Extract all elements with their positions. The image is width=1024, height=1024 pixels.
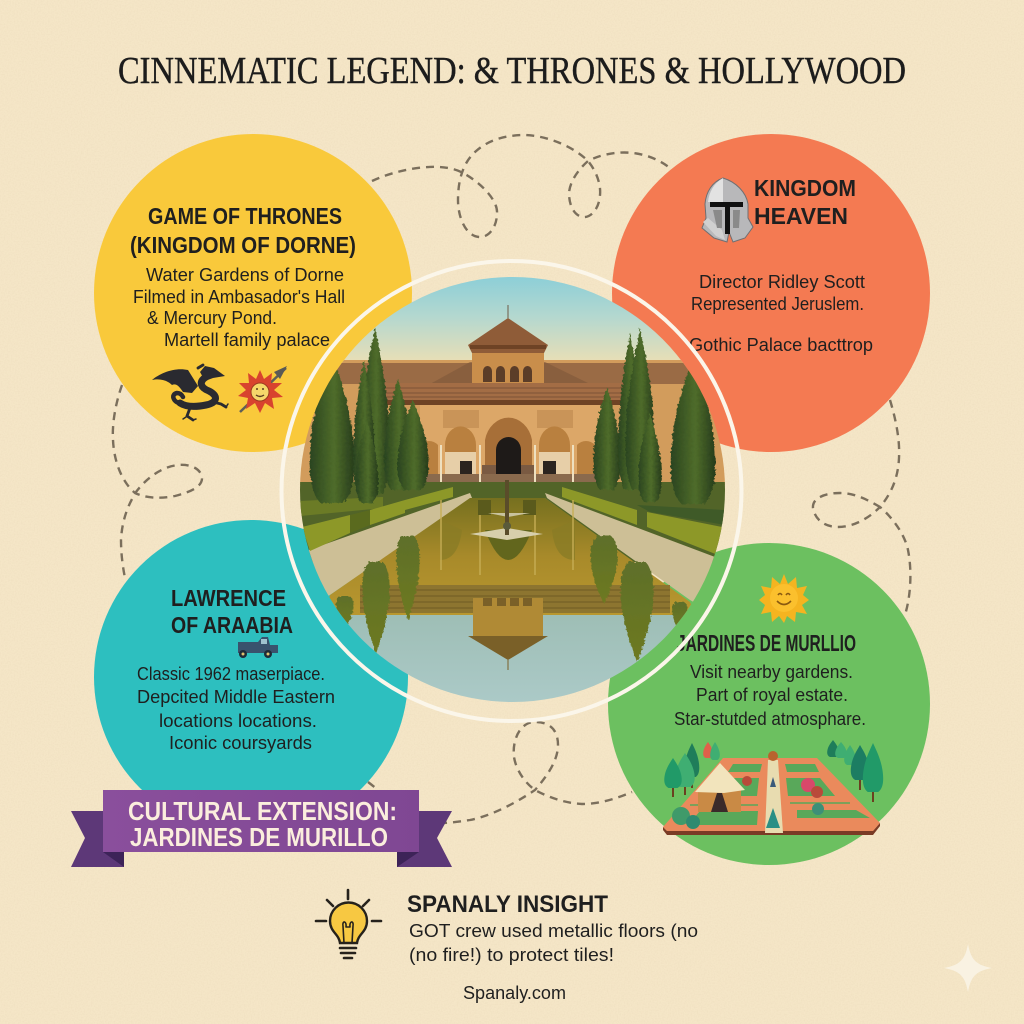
heading: Lawrence of Arabia: LAWRENCE (171, 585, 286, 611)
heading: Game of Thrones (130, 203, 356, 258)
text: Jardines details: Star-stutded atmosphare. (674, 709, 866, 729)
heading: Kingdom Heaven (754, 175, 856, 229)
text: Lawrence of Arabia details: Depcited Middle Eastern (137, 687, 335, 707)
banner: Cultural Extension: JARDINES DE MURILLO (130, 822, 388, 852)
heading: Kingdom Heaven: KINGDOM (754, 175, 856, 201)
dashed connector: right (813, 400, 910, 615)
insight text (407, 891, 698, 965)
heading: Game of Thrones: GAME OF THRONES (148, 203, 342, 229)
central photo: palace courtyard with reflecting pool (295, 270, 730, 720)
icon: sparkle (944, 944, 992, 992)
text: Lawrence of Arabia details: Classic 1962 maserpiace. (137, 664, 325, 684)
text: Jardines details (674, 662, 866, 729)
banner: Cultural Extension (71, 790, 452, 867)
banner: Cultural Extension: CULTURAL EXTENSION: (128, 796, 397, 826)
website credit: Spanaly.com (463, 983, 566, 1003)
panel: Kingdom of Heaven (612, 134, 930, 452)
icon: dragon (152, 365, 228, 420)
insight text: SPANALY INSIGHT (407, 891, 608, 918)
text: Game of Thrones details: & Mercury Pond. (147, 308, 277, 328)
text: Kingdom of Heaven details: Represented Jeruslem. (691, 294, 864, 314)
icon: light bulb (316, 890, 381, 958)
panel: Lawrence of Arabia (94, 520, 408, 834)
text: Kingdom of Heaven details: Gothic Palace bacttrop (689, 335, 873, 355)
text: Jardines details: Visit nearby gardens. (690, 662, 853, 682)
text: Game of Thrones details: Martell family palace (164, 330, 330, 350)
heading: Lawrence of Arabia: OF ARAABIA (171, 612, 293, 638)
text: Lawrence of Arabia details: locations locations. (159, 711, 317, 731)
text: Game of Thrones details: Water Gardens of Dorne (146, 265, 344, 285)
insight text: GOT crew used metallic floors (no (409, 921, 698, 941)
dashed connector: bottom (368, 722, 632, 823)
title: CINNEMATIC LEGEND: & THRONES & HOLLYWOOD (118, 50, 906, 92)
icon: knight helmet (702, 178, 753, 242)
text: Lawrence of Arabia details (137, 664, 335, 753)
text: Kingdom of Heaven details (689, 272, 873, 355)
panel: Jardines de Murillo (608, 543, 930, 865)
text: Kingdom of Heaven details: Director Ridley Scott (699, 272, 865, 292)
icon: sun and spear (238, 366, 287, 413)
text: Game of Thrones details (133, 265, 345, 350)
heading: Lawrence of Arabia (171, 585, 293, 638)
dashed connector: top (372, 135, 670, 237)
insight text: (no fire!) to protect tiles! (409, 945, 614, 965)
white ring around photo (282, 261, 742, 721)
icon: garden illustration (663, 740, 883, 835)
text: Jardines details: Part of royal estate. (696, 685, 848, 705)
text: Lawrence of Arabia details: Iconic coursyards (169, 733, 312, 753)
panel: Game of Thrones (94, 134, 412, 452)
icon: truck (238, 637, 278, 658)
heading: Jardines de Murlio: JARDINES DE MURLLIO (677, 630, 856, 656)
text: Game of Thrones details: Filmed in Ambasador's Hall (133, 287, 345, 307)
heading: Kingdom Heaven: HEAVEN (754, 203, 848, 229)
heading: Game of Thrones: (KINGDOM OF DORNE) (130, 232, 356, 258)
dashed connector: left (113, 385, 202, 578)
icon: smiling sun (759, 574, 809, 623)
